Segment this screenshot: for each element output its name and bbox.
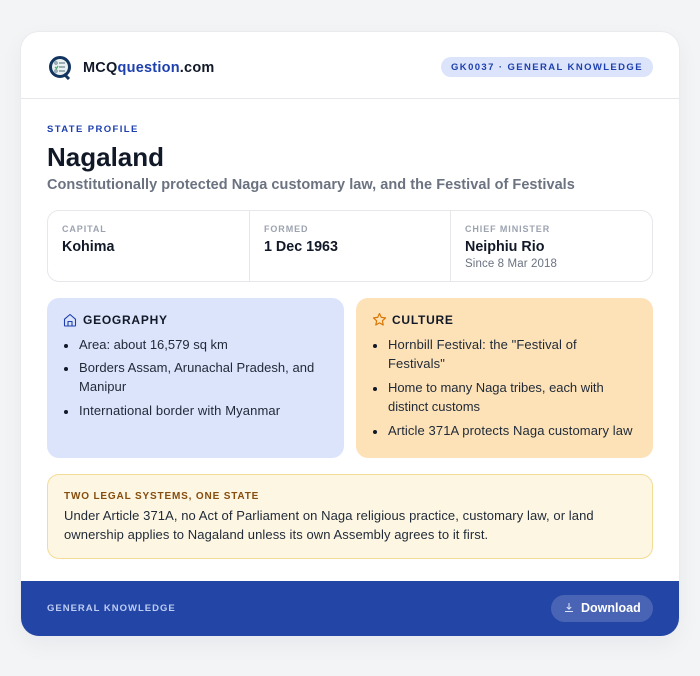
icon: house bbox=[64, 314, 76, 326]
subtitle: Constitutionally protected Naga customary law, and the Festival of Festivals bbox=[47, 177, 575, 193]
fact: chief minister: Neiphiu Rio bbox=[465, 239, 544, 255]
list bbox=[64, 337, 314, 418]
icon: MCQ logo bbox=[49, 56, 71, 80]
code badge bbox=[441, 57, 653, 77]
callout body: Under Article 371A, no Act of Parliament on Naga religious practice, customary law, or land bbox=[64, 508, 594, 523]
list: Article 371A protects Naga customary law bbox=[388, 423, 633, 438]
fact: chief minister: Since 8 Mar 2018 bbox=[465, 258, 557, 270]
fact: chief minister bbox=[465, 224, 557, 270]
list: Area: about 16,579 sq km bbox=[79, 337, 228, 352]
list: International border with Myanmar bbox=[79, 403, 280, 418]
panel: geography bbox=[47, 298, 344, 458]
eyebrow: STATE PROFILE bbox=[47, 124, 139, 135]
fact: chief minister: CHIEF MINISTER bbox=[465, 224, 550, 234]
footer bbox=[21, 581, 679, 636]
icon: download bbox=[565, 603, 573, 612]
fact: capital: Kohima bbox=[62, 239, 114, 255]
list: Festivals" bbox=[388, 356, 445, 371]
download button bbox=[551, 595, 653, 622]
brand name: MCQquestion.com bbox=[83, 60, 215, 76]
callout body bbox=[64, 508, 594, 542]
callout body: ownership applies to Nagaland unless its own Assembly agrees to it first. bbox=[64, 527, 488, 542]
header bbox=[21, 32, 679, 99]
facts table bbox=[47, 210, 653, 282]
fact: formed: FORMED bbox=[264, 224, 308, 234]
list: Home to many Naga tribes, each with bbox=[388, 380, 604, 395]
fact: formed bbox=[250, 211, 451, 281]
list: Borders Assam, Arunachal Pradesh, and bbox=[79, 360, 314, 375]
callout bbox=[47, 474, 653, 559]
list: Hornbill Festival: the "Festival of bbox=[388, 337, 577, 352]
footer label: GENERAL KNOWLEDGE bbox=[47, 603, 176, 614]
fact: capital bbox=[48, 211, 250, 281]
fact: capital: CAPITAL bbox=[62, 224, 107, 234]
list: Manipur bbox=[79, 379, 126, 394]
icon: star bbox=[372, 312, 386, 326]
list bbox=[373, 337, 633, 438]
title: Nagaland bbox=[47, 142, 164, 172]
panel: culture bbox=[356, 298, 653, 458]
heading: GEOGRAPHY bbox=[83, 313, 168, 327]
button label: Download bbox=[581, 601, 641, 615]
heading: CULTURE bbox=[392, 313, 454, 327]
fact: formed: 1 Dec 1963 bbox=[264, 239, 338, 255]
code badge: GK0037 · GENERAL KNOWLEDGE bbox=[451, 62, 643, 73]
callout heading: TWO LEGAL SYSTEMS, ONE STATE bbox=[64, 490, 259, 502]
list: distinct customs bbox=[388, 399, 480, 414]
